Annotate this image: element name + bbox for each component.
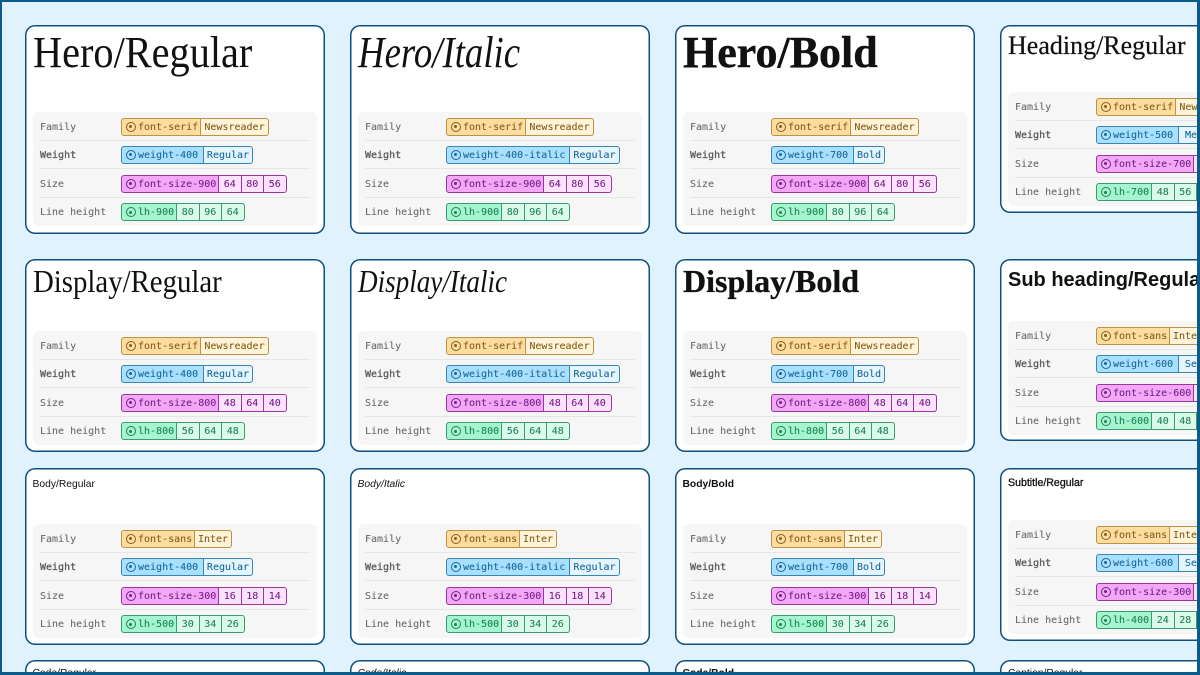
panel: Sub heading/Regular [1000,259,1200,441]
token table: Body/Bold: font-sans [788,534,842,544]
token table: Hero/Bold: 96 [854,207,866,218]
token table: Hero/Italic: font-serif [463,122,523,132]
token table: Display/Italic: font-size-800 [463,398,541,409]
token table: Display/Bold: Size [690,398,714,409]
token table: Display/Bold: 40 [919,398,931,409]
token table: Display/Regular [33,331,317,445]
token table: Hero/Regular: font-serif [138,122,198,132]
heading: Body/Italic: Body/Italic [358,479,405,490]
token table: Hero/Bold: font-serif [788,122,848,132]
heading: Display/Bold: Display/Bold [683,263,859,299]
token table: Body/Italic: font-sans [463,534,517,544]
token table: Display/Italic: 48 [549,398,561,409]
token table: Hero/Regular: 96 [204,207,216,218]
token table: Display/Regular: Regular [207,369,249,380]
token table: Display/Bold: font-size-800 [788,398,866,409]
token table: Sub heading/Regular: Weight [1015,359,1051,370]
token table: Subtitle/Regular: font-size-300 [1113,587,1191,598]
token table: Subtitle/Regular: font-sans [1113,530,1167,540]
token table: Hero/Regular: 56 [269,179,281,190]
token table: Body/Regular: 34 [204,619,216,630]
token table: Heading/Regular: font-size-700 [1113,159,1191,170]
token table: Hero/Italic: Regular [573,150,616,161]
token table: Display/Regular: Weight [40,369,76,380]
token table: Body/Regular: Regular [207,562,249,573]
panel: Display/Bold [675,259,975,452]
token table: Display/Bold [683,331,967,445]
token table: Hero/Regular: Weight [40,150,76,161]
token table: Hero/Italic: Line height [365,207,431,218]
token table: Hero/Bold: 64 [877,207,889,218]
panel: Body/Bold [675,468,975,645]
token table: Body/Italic: font-size-300 [463,591,541,602]
token table: Hero/Bold: Weight [690,150,726,161]
token table: Hero/Regular [33,112,317,226]
token table: Display/Regular: 64 [204,426,216,437]
token table: Display/Italic: weight-400-italic [463,369,565,380]
token table: Sub heading/Regular: Size [1015,388,1039,399]
token table: Hero/Regular: 64 [224,179,236,190]
token table: Hero/Italic: lh-900 [463,207,499,218]
token table: Subtitle/Regular: Weight [1015,558,1051,569]
token table: Sub heading/Regular: lh-600 [1113,416,1149,427]
heading: Display/Italic: Display/Italic [358,263,507,299]
token table: Display/Italic: Size [365,398,389,409]
token table: Hero/Italic: font-size-900 [463,179,541,190]
panel: Subtitle/Regular [1000,468,1200,641]
panel: Heading/Regular [1000,25,1200,213]
token table: Body/Italic: weight-400-italic [463,562,565,573]
token table: Heading/Regular: font-serif [1113,102,1173,112]
token table: Hero/Italic [358,112,642,226]
token table: Sub heading/Regular: font-size-600 [1113,388,1191,399]
token table: Display/Regular: Line height [40,426,106,437]
heading: Hero/Regular: Hero/Regular [33,28,252,77]
token table: Body/Regular: 16 [224,591,236,602]
panel: Hero/Bold [675,25,975,234]
token table: Display/Italic: Weight [365,369,401,380]
token table: Body/Italic: Weight [365,562,401,573]
heading: Display/Regular: Display/Regular [33,263,222,299]
panel: Display/Regular [25,259,325,452]
panel: Code/Regular [25,660,325,675]
panel: Code/Italic [350,660,650,675]
token table: Body/Regular: Inter [198,534,228,544]
panel: Caption/Regular [1000,660,1200,675]
panel: Hero/Regular [25,25,325,234]
token table: Body/Bold: weight-700 [788,562,848,573]
token table: Body/Italic: lh-500 [463,619,499,630]
token table: Body/Bold: Inter [848,534,878,544]
token table: Display/Regular: Family [40,340,76,352]
token table: Hero/Bold [683,112,967,226]
token table: Hero/Bold: Family [690,122,726,132]
token table: Display/Italic: Family [365,340,401,352]
token table: Hero/Italic: 64 [552,207,564,218]
token table: Display/Bold: 64 [896,398,908,409]
token table: Hero/Bold: weight-700 [788,150,848,161]
token table: Display/Italic: lh-800 [463,426,499,437]
token table: Body/Regular: lh-500 [138,619,174,630]
token table: Body/Italic: Inter [523,534,553,544]
token table: Body/Italic: 34 [529,619,541,630]
token table: Body/Italic [358,524,642,638]
token table: Hero/Bold: 80 [832,207,844,218]
token table: Hero/Regular: Newsreader [204,122,265,132]
token table: Body/Regular: Weight [40,562,76,573]
token table: Hero/Bold: font-size-900 [788,179,866,190]
token table: Sub heading/Regular: Line height [1015,416,1081,427]
token table: Hero/Italic: 80 [571,179,583,190]
token table: Display/Bold: 56 [832,426,844,437]
token table: Hero/Regular: weight-400 [138,150,198,161]
panel: Display/Italic [350,259,650,452]
token table: Hero/Regular: Regular [207,150,249,161]
token table: Heading/Regular: Weight [1015,130,1051,141]
token table: Sub heading/Regular: font-sans [1113,330,1167,342]
token table: Display/Italic: 64 [529,426,541,437]
token table: Hero/Regular: Line height [40,207,106,218]
token table: Display/Bold: font-serif [788,340,848,352]
token table: Subtitle/Regular: 24 [1157,615,1169,626]
token table: Display/Regular: 40 [269,398,281,409]
token table: Sub heading/Regular: weight-600 [1113,359,1173,370]
token table: Body/Italic: 30 [507,619,519,630]
panel: Body/Regular [25,468,325,645]
token table: Body/Italic: 18 [571,591,583,602]
token table: Display/Regular: font-serif [138,340,198,352]
token table: Display/Bold: Bold [857,369,881,380]
token table: Body/Regular: Family [40,534,76,544]
token table: Hero/Italic: 56 [594,179,606,190]
token table: Hero/Regular: 80 [182,207,194,218]
token table: Heading/Regular: lh-700 [1113,187,1149,198]
token table: Body/Bold: 14 [919,591,931,602]
token table: Hero/Bold: Size [690,179,714,190]
panel: Body/Italic [350,468,650,645]
token table: Hero/Bold: 56 [919,179,931,190]
token table: Body/Regular: font-size-300 [138,591,216,602]
token table: Body/Italic: 14 [594,591,606,602]
token table: Body/Bold: 16 [874,591,886,602]
token table: Hero/Bold: Newsreader [854,122,915,132]
token table: Hero/Regular: 80 [246,179,258,190]
token table: Display/Regular: weight-400 [138,369,198,380]
token table: Display/Italic: Regular [573,369,616,380]
token table: Heading/Regular: 48 [1157,187,1169,198]
token table: Body/Regular: Line height [40,619,106,630]
token table: Hero/Bold: Line height [690,207,756,218]
token table: Body/Bold: Bold [857,562,881,573]
token table: Subtitle/Regular: Family [1015,530,1051,540]
token table: Body/Regular: 14 [269,591,281,602]
token table: Display/Bold: weight-700 [788,369,848,380]
token table: Display/Bold: Newsreader [854,340,915,352]
heading: Hero/Italic: Hero/Italic [358,28,520,77]
token table: Display/Italic [358,331,642,445]
token table: Hero/Bold: Bold [857,150,881,161]
token table: Body/Regular: font-sans [138,534,192,544]
token table: Sub heading/Regular [1008,321,1200,435]
token table: Heading/Regular: weight-500 [1113,130,1173,141]
token table: Hero/Italic: 80 [507,207,519,218]
token table: Body/Italic: Line height [365,619,431,630]
token table: Display/Regular: 48 [227,426,239,437]
token table: Body/Bold: Size [690,591,714,602]
token table: Body/Regular [33,524,317,638]
heading: Body/Bold: Body/Bold [682,479,734,490]
token table: Display/Bold: Weight [690,369,726,380]
token table: Body/Bold: Weight [690,562,726,573]
token table: Display/Italic: Newsreader [529,340,590,352]
token table: Hero/Bold: lh-900 [788,207,824,218]
token table: Body/Regular: 30 [182,619,194,630]
token table: Display/Bold: Line height [690,426,756,437]
token table: Display/Regular: 64 [246,398,258,409]
token table: Body/Bold [683,524,967,638]
heading: Heading/Regular: Heading/Regular [1008,31,1186,60]
token table: Display/Bold: 48 [874,398,886,409]
token table: Subtitle/Regular: weight-600 [1113,558,1173,569]
token table: Display/Regular: lh-800 [138,426,174,437]
token table: Body/Bold: 18 [896,591,908,602]
panel: Hero/Italic [350,25,650,234]
token table: Display/Italic: font-serif [463,340,523,352]
token table: Body/Regular: Size [40,591,64,602]
token table: Heading/Regular: Size [1015,159,1039,170]
heading: Subtitle/Regular: Subtitle/Regular [1008,477,1083,489]
token table: Display/Bold: Family [690,340,726,352]
token table: Subtitle/Regular: 28 [1179,615,1191,626]
token table: Body/Italic: 26 [552,619,564,630]
token table: Body/Bold: font-size-300 [788,591,866,602]
token table: Body/Regular: weight-400 [138,562,198,573]
token table: Display/Regular: 56 [182,426,194,437]
token table: Hero/Italic: Size [365,179,389,190]
token table: Hero/Regular: Family [40,122,76,132]
token table: Hero/Regular: lh-900 [138,207,174,218]
token table: Heading/Regular [1008,92,1200,206]
token table: Hero/Regular: font-size-900 [138,179,216,190]
token table: Display/Regular: 48 [224,398,236,409]
token table: Display/Bold: lh-800 [788,426,824,437]
token table: Hero/Italic: 96 [529,207,541,218]
token table: Display/Italic: 48 [552,426,564,437]
token table: Body/Regular: 18 [246,591,258,602]
token table: Display/Italic: 40 [594,398,606,409]
token table: Subtitle/Regular: lh-400 [1113,615,1149,626]
token table: Display/Italic: 64 [571,398,583,409]
token table: Display/Regular: Newsreader [204,340,265,352]
heading: Body/Regular: Body/Regular [32,479,95,490]
token table: Display/Italic: 56 [507,426,519,437]
token table: Body/Regular: 26 [227,619,239,630]
token table: Hero/Italic: Newsreader [529,122,590,132]
token table: Body/Bold: 30 [832,619,844,630]
token table: Hero/Regular: Size [40,179,64,190]
token table: Heading/Regular: Line height [1015,187,1081,198]
token table: Body/Bold: lh-500 [788,619,824,630]
token table: Display/Italic: Line height [365,426,431,437]
panel: Code/Bold [675,660,975,675]
token table: Subtitle/Regular: Size [1015,587,1039,598]
token table: Hero/Regular: 64 [227,207,239,218]
token table: Sub heading/Regular: Family [1015,330,1051,342]
token table: Body/Italic: Regular [573,562,616,573]
token table: Hero/Bold: 80 [896,179,908,190]
token table: Body/Bold: 26 [877,619,889,630]
token table: Hero/Italic: Weight [365,150,401,161]
heading: Hero/Bold: Hero/Bold [683,28,878,77]
token table: Heading/Regular: 56 [1179,187,1191,198]
token table: Body/Bold: Line height [690,619,756,630]
token table: Subtitle/Regular: Line height [1015,615,1081,626]
token table: Heading/Regular: Family [1015,102,1051,112]
token table: Body/Bold: 34 [854,619,866,630]
token table: Hero/Italic: Family [365,122,401,132]
token table: Sub heading/Regular: 40 [1157,416,1169,427]
token table: Display/Bold: 64 [854,426,866,437]
token table: Display/Regular: Size [40,398,64,409]
token table: Body/Bold: Family [690,534,726,544]
token table: Body/Italic: Size [365,591,389,602]
token table: Hero/Bold: 64 [874,179,886,190]
token table: Hero/Italic: weight-400-italic [463,150,565,161]
token table: Subtitle/Regular [1008,520,1200,634]
token table: Body/Italic: 16 [549,591,561,602]
token table: Hero/Italic: 64 [549,179,561,190]
token table: Body/Italic: Family [365,534,401,544]
token table: Display/Bold: 48 [877,426,889,437]
token table: Sub heading/Regular: 48 [1179,416,1191,427]
token table: Display/Regular: font-size-800 [138,398,216,409]
